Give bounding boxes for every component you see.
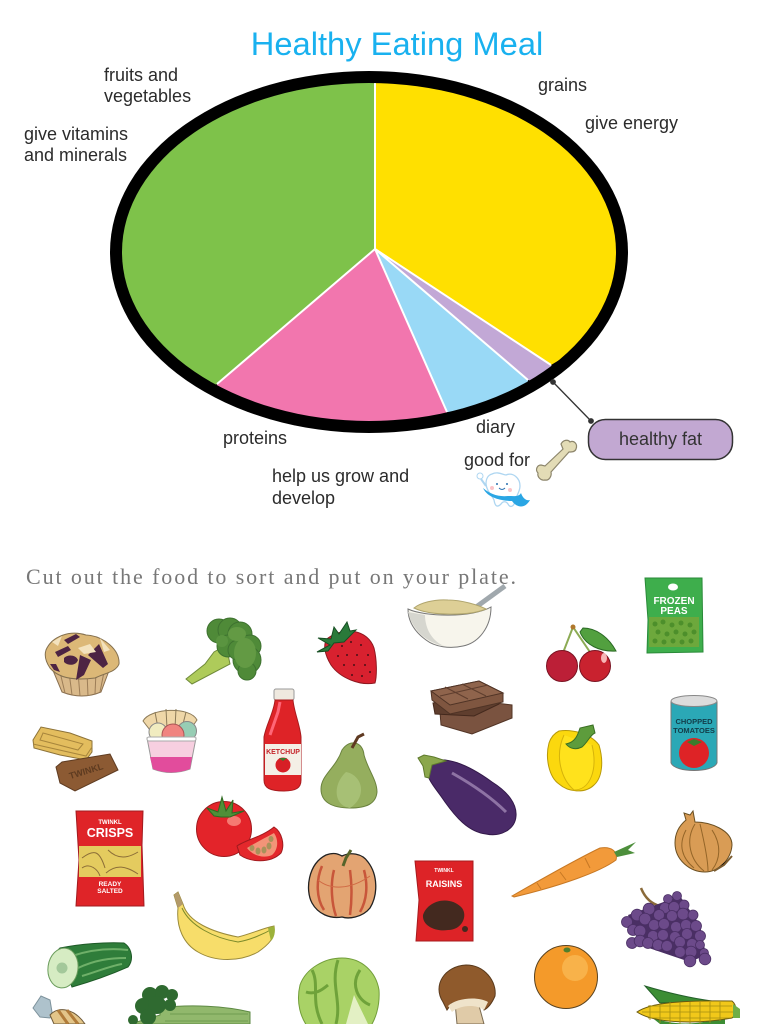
slice: grains [375,83,616,365]
food: biscuits [33,727,118,791]
food: yellow pepper [547,725,602,791]
food: crisps bag: TWINKL [98,820,122,826]
label: grains: grains [538,75,587,95]
slice: healthy fat [388,258,552,380]
icon: tooth hero [477,473,530,506]
slice: proteins [216,250,448,421]
food: raisins bag [415,861,473,941]
instruction text: Cut out the food to sort and put on your plate. [26,564,516,589]
food: pear [321,734,377,808]
callout: healthy fat [588,420,732,460]
label: help us grow and develop: develop [272,488,335,508]
food: crisps bag: CRISPS [87,826,133,840]
callout: healthy fat: healthy fat [619,429,702,449]
food: aubergine [418,755,516,835]
food: banana [174,892,275,960]
icon: bone [537,440,577,480]
food: strawberry [317,622,376,684]
label: give vitamins and minerals: give vitamins [24,124,128,144]
title: Healthy Eating Meal [251,25,543,62]
food: cucumber [45,943,131,990]
food: raisins bag: RAISINS [426,879,462,889]
food: chocolate [431,681,512,734]
food: chopped tomatoes tin: TOMATOES [673,726,715,735]
food: ketchup bottle [264,689,301,791]
food: apple [309,850,376,918]
food: corn [637,986,740,1024]
slice: dairy [378,252,528,412]
food: mushroom [439,965,495,1024]
food: crisps bag: READY [99,881,122,888]
label: good for: good for [464,450,530,470]
food: chopped tomatoes tin: CHOPPED [675,717,713,726]
label: give energy: give energy [585,113,678,133]
label: fruits and vegetables: fruits and [104,65,178,85]
food: crisps bag [76,811,144,906]
food: broccoli [186,618,261,684]
slice: fruits and vegetables [122,83,375,384]
food: muffin [45,633,119,696]
food: grapes [622,888,711,967]
label: help us grow and develop: help us grow and [272,466,409,486]
food: frozen peas bag: PEAS [660,606,688,617]
food: onion [675,811,732,872]
food: biscuits: TWINKL [68,761,105,781]
food: frozen peas bag [645,578,703,653]
food: crisps bag: SALTED [97,888,123,895]
label: diary: diary [476,417,515,437]
pie chart: healthy eating plate [110,71,628,433]
food: bowl of porridge [408,586,505,647]
food: ketchup bottle: KETCHUP [266,749,300,756]
food: wrapped sweet [33,996,85,1024]
food: cherries [546,624,616,682]
label: give vitamins and minerals: and minerals [24,145,127,165]
food: chopped tomatoes tin [671,696,717,770]
label: proteins: proteins [223,428,287,448]
food: lettuce [298,958,379,1024]
food: celery [128,985,250,1024]
food: ice cream cup [143,709,197,772]
food: frozen peas bag: FROZEN [653,596,695,607]
label: fruits and vegetables: vegetables [104,86,191,106]
food: carrot [512,842,636,897]
leader line to healthy fat [551,380,593,423]
food: orange [534,946,598,1008]
food: tomato [196,797,283,861]
food: raisins bag: TWINKL [434,868,454,874]
